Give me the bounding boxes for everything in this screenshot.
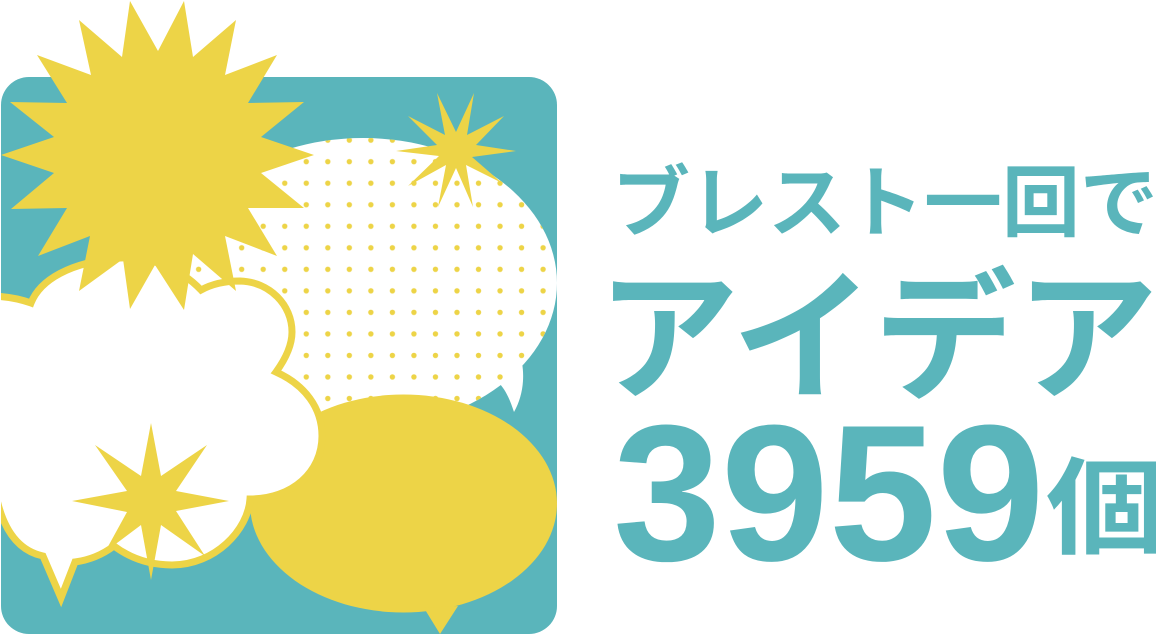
big number: 3959 — [613, 385, 1045, 602]
icon: yellow star on cloud — [72, 423, 229, 580]
heading line 2: アイデア — [597, 260, 1156, 419]
heading line 1: ブレスト一回で — [612, 159, 1156, 247]
yellow speech bubble — [250, 394, 557, 634]
dotted white speech bubble — [169, 138, 557, 428]
panel: teal rounded square — [1, 77, 557, 634]
white cloud speech bubble with yellow outline — [0, 258, 322, 598]
icon: small yellow star on teal — [396, 93, 516, 207]
icon: large yellow starburst — [1, 1, 314, 310]
